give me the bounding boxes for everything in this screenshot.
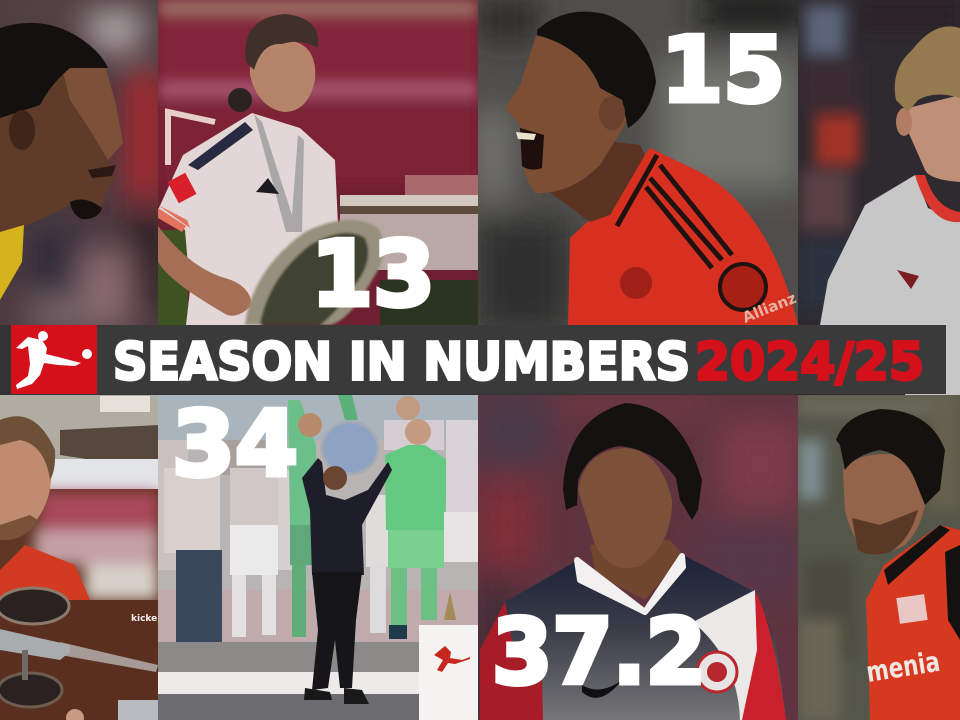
icon: Bundesliga logo — [11, 325, 97, 394]
heading: 2024/25: 2024/25 — [695, 332, 924, 392]
photo: Bayern team celebrating with Kompany — [158, 392, 478, 720]
text: sponsor on sleeve: Allianz — [740, 289, 799, 327]
text: kicker plaque: kicker — [131, 614, 162, 624]
heading: season in numbers: SEASON IN NUMBERS — [113, 332, 690, 392]
banner — [11, 325, 946, 394]
icon: small Bundesliga logo — [434, 646, 470, 672]
number: 37.2: 37.2 — [492, 600, 706, 705]
photo: Kane with Torjägerkanone — [0, 395, 162, 720]
number: 13: 13 — [311, 222, 435, 327]
photo: Leverkusen player in red jersey — [798, 395, 960, 720]
photo: player in white Puma jersey — [798, 0, 960, 395]
photo: Frankfurt player with braids — [478, 395, 800, 720]
photo: Müller holding the Meisterschale — [158, 0, 478, 325]
number: 34: 34 — [172, 392, 298, 497]
photo: Musiala shouting in red jersey — [478, 0, 810, 330]
photo: goalkeeper in yellow, profile — [0, 0, 165, 330]
number: 15: 15 — [661, 18, 785, 123]
